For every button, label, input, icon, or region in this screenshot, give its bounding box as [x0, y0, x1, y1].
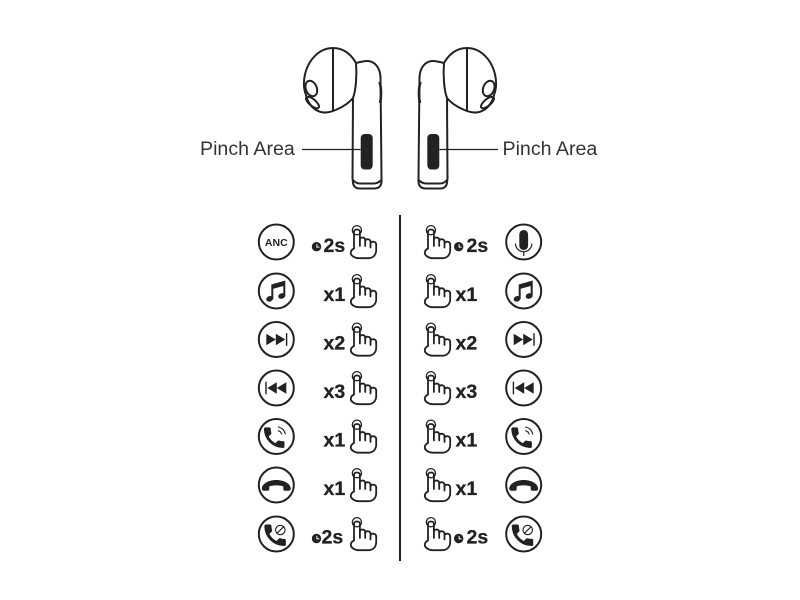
icon: hand: [351, 323, 376, 356]
icon: clock: [312, 242, 321, 251]
label: x1: x1: [324, 284, 345, 306]
icon: music note: [506, 274, 541, 308]
icon: clock: [454, 534, 463, 543]
row: microphone hold 2s: [425, 224, 541, 260]
label: x3: x3: [324, 381, 345, 403]
icon: hand: [351, 469, 376, 501]
icon: next track: [259, 322, 294, 357]
earbud: left: [303, 48, 382, 188]
row: end call x1: [259, 468, 376, 502]
icon: hand: [425, 420, 450, 453]
icon: hand: [425, 518, 450, 550]
icon: reject call: [259, 516, 294, 552]
icon: music note: [259, 274, 294, 308]
icon: ANC: ANC: [265, 237, 288, 249]
left ear vents: [303, 79, 321, 110]
label: 2s: 2s: [466, 526, 488, 548]
icon: hand: [425, 226, 450, 258]
icon: end call: [506, 468, 541, 502]
icon: hand: [351, 372, 376, 404]
icon: next track: [506, 322, 541, 357]
icon: incoming call: [259, 419, 294, 454]
icon: hand: [425, 323, 450, 356]
label: x1: x1: [324, 478, 345, 500]
right pinch area: [427, 134, 439, 170]
icon: hand: [351, 226, 376, 258]
label: x1: x1: [324, 430, 345, 452]
row: reject call hold 2s: [259, 516, 376, 552]
label: x2: x2: [324, 332, 345, 354]
label: 2s: 2s: [324, 235, 345, 257]
row: previous x3: [425, 370, 541, 406]
row: next x2: [425, 322, 541, 357]
icon: end call: [259, 468, 294, 502]
right stem: [418, 61, 448, 188]
center divider: [399, 215, 401, 561]
icon: incoming call: [506, 419, 541, 454]
label: x1: x1: [456, 430, 477, 452]
right pinch leader line: [440, 148, 498, 150]
icon: clock: [454, 242, 463, 251]
label: x2: x2: [456, 332, 477, 354]
row: ANC hold 2s: [259, 224, 376, 260]
label: x3: x3: [456, 381, 477, 403]
row: reject call hold 2s: [425, 516, 541, 552]
earbud: right: [418, 48, 497, 188]
icon: hand: [425, 469, 450, 501]
panel: left earbud controls: [259, 224, 376, 552]
row: music x1: [259, 274, 376, 308]
row: previous x3: [259, 370, 376, 406]
row: answer call x1: [425, 419, 541, 454]
label: x1: x1: [456, 478, 477, 500]
icon: hand: [351, 518, 376, 550]
left pinch leader line: [302, 148, 360, 150]
left label: Pinch Area: [200, 138, 295, 160]
label: 2s: 2s: [466, 235, 488, 257]
label: 2s: 2s: [322, 526, 343, 548]
panel: right earbud controls: [425, 224, 541, 552]
row: music x1: [425, 274, 541, 308]
icon: hand: [351, 275, 376, 307]
icon: hand: [425, 372, 450, 404]
icon: microphone: [506, 224, 541, 260]
icon: clock: [312, 534, 321, 543]
left pinch area: [361, 134, 373, 170]
icon: reject call: [506, 516, 541, 552]
icon: previous track: [259, 370, 294, 406]
icon: hand: [351, 420, 376, 453]
left stem: [352, 61, 382, 188]
left ear tip: [304, 48, 356, 113]
right ear tip: [444, 48, 496, 113]
right label: Pinch Area: [502, 138, 597, 160]
icon: hand: [425, 275, 450, 307]
label: x1: x1: [456, 284, 477, 306]
row: answer call x1: [259, 419, 376, 454]
icon: previous track: [506, 370, 541, 406]
right ear vents: [479, 79, 497, 110]
row: next x2: [259, 322, 376, 357]
row: end call x1: [425, 468, 541, 502]
